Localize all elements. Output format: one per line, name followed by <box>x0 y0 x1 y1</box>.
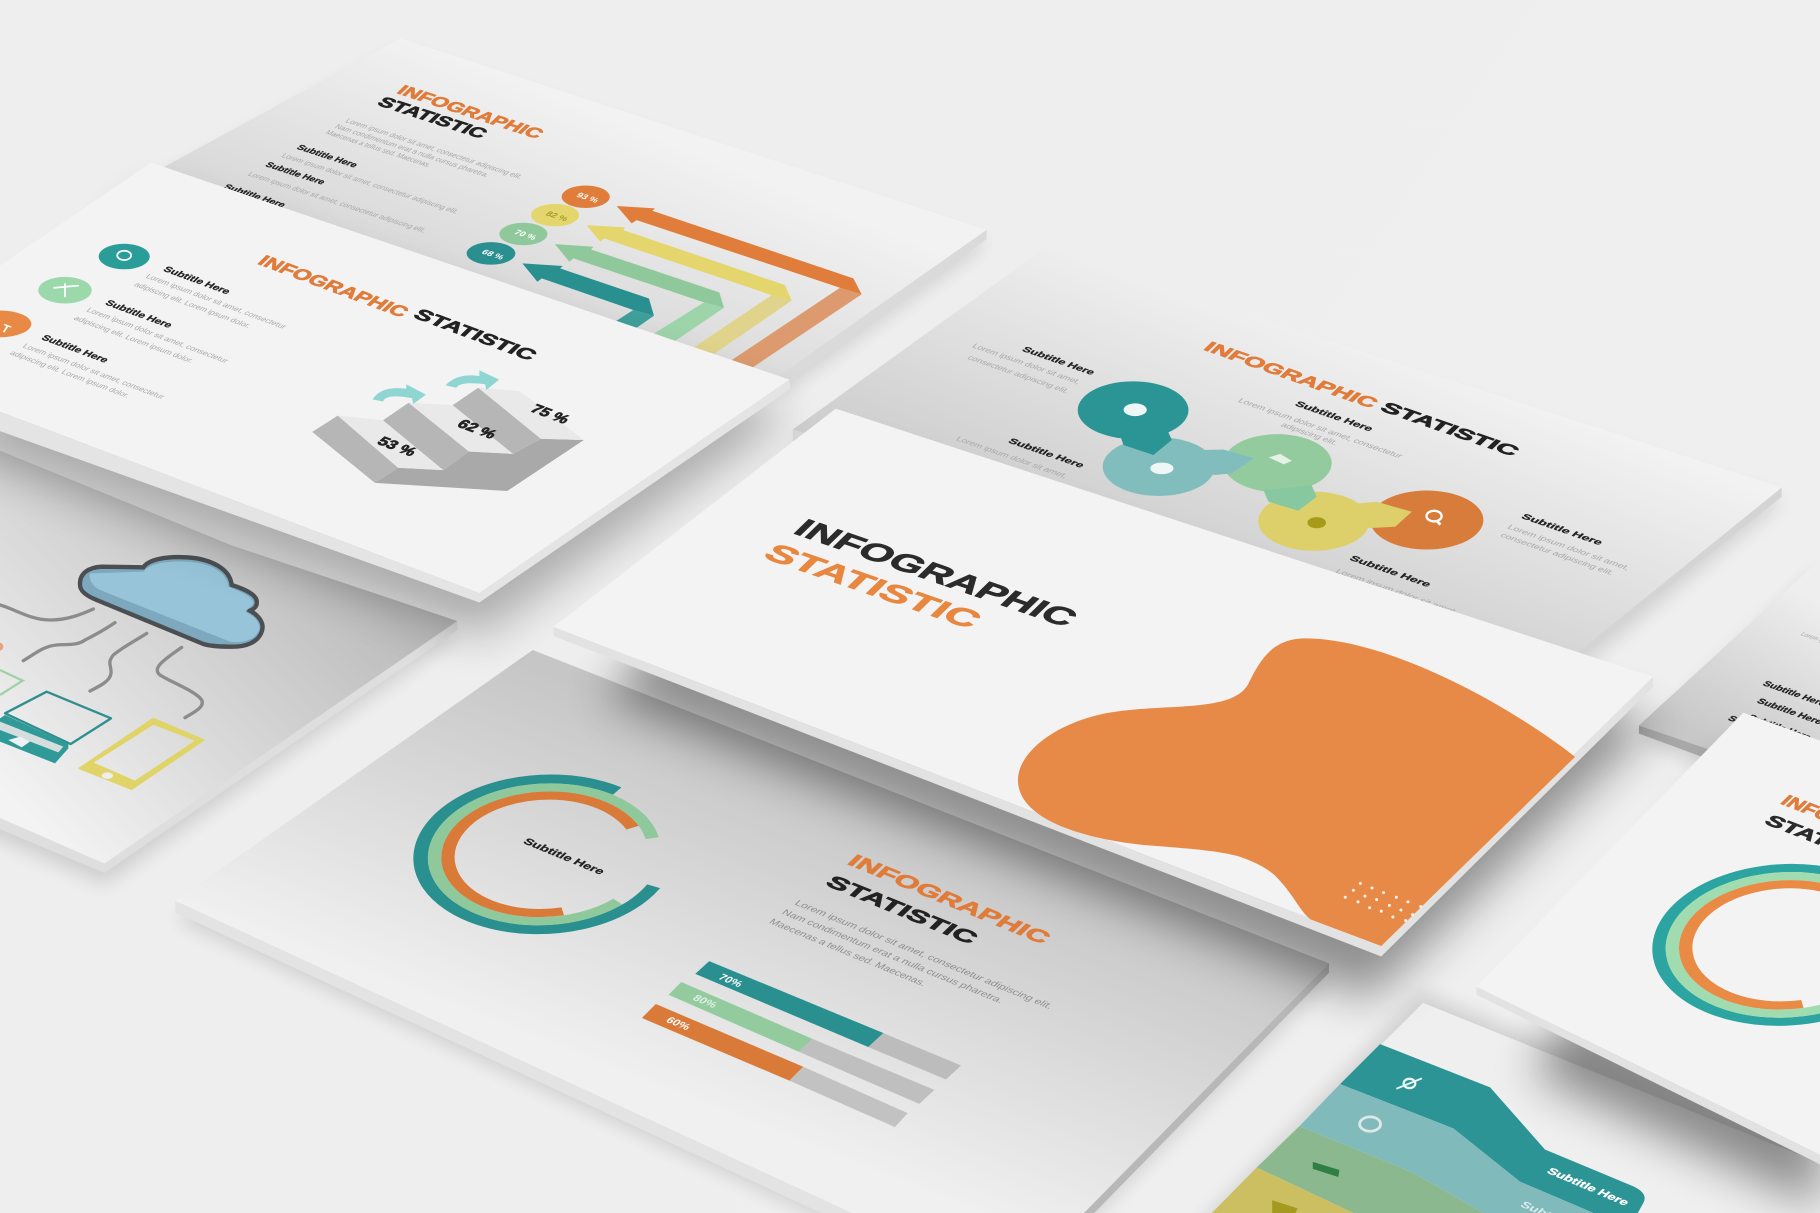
circle: green <box>1223 434 1332 511</box>
body text: Maecenas a tellus sed. Maecenas. <box>766 917 928 988</box>
slide face <box>151 38 987 378</box>
text: item 1 <box>966 342 1097 395</box>
slide: side slide subtitles <box>1639 559 1820 778</box>
ring: teal <box>1609 839 1820 1051</box>
title <box>757 514 1085 634</box>
slide edge <box>1476 987 1820 1164</box>
title: INFOGRAPHIC <box>253 253 413 321</box>
slide edge <box>0 380 790 602</box>
percent badge: 70 <box>499 223 547 245</box>
percent badge: 93 <box>562 186 610 208</box>
text: item 4 <box>1498 512 1633 577</box>
slide edge <box>766 230 987 385</box>
orange blob <box>1018 638 1575 946</box>
list item 1: Lorem ipsum dolor sit amet, consectetur <box>144 272 289 330</box>
subtitle list: Su <box>1725 714 1746 726</box>
text: item 3: Lorem ipsum dolor sit amet, <box>954 435 1070 480</box>
title <box>1760 793 1820 875</box>
icon: laptop <box>0 692 111 763</box>
band labels: Subtitle Here <box>1544 1166 1631 1208</box>
title: INFOGRAPHIC <box>393 82 548 142</box>
arrow: green <box>555 244 724 341</box>
slide edge <box>1639 725 1776 778</box>
text: item 1: Subtitle Here <box>1019 345 1097 377</box>
slide face <box>0 163 789 593</box>
slide face <box>793 248 1782 659</box>
circle: yellow <box>1258 492 1412 551</box>
slide: cloud network <box>0 441 457 873</box>
subtitle list <box>221 143 462 234</box>
list item 3: Lorem ipsum dolor sit amet, consectetur <box>21 342 167 400</box>
percent badge: 68 <box>467 242 515 265</box>
percent badge: 68: 68 % <box>480 248 507 261</box>
slide face <box>1639 559 1820 768</box>
title <box>1200 339 1524 459</box>
circle: orange <box>1370 491 1483 550</box>
title: INFOGRAPHIC <box>843 852 1055 948</box>
slide face <box>554 409 1653 946</box>
slide face <box>175 650 1329 1213</box>
percent badge: 93: 93 % <box>574 191 601 204</box>
icon: teal band <box>1396 1078 1422 1089</box>
band: light teal <box>1299 1084 1593 1213</box>
arrow: stair step 1 <box>373 384 426 404</box>
ring: orange <box>431 783 657 926</box>
circle: teal <box>1078 381 1188 455</box>
title <box>821 852 1055 948</box>
list item 3: adipiscing elit. Lorem ipsum dolor. <box>8 349 133 399</box>
body text: Lorem ipsum dolor sit amet, consectetur adipiscing elit. <box>343 117 526 180</box>
text: item 1: consectetur adipiscing elit. <box>966 353 1072 395</box>
network wires <box>0 605 202 718</box>
circle: light teal <box>1103 437 1254 496</box>
text: item 3: Subtitle Here <box>1005 437 1086 470</box>
title: STATISTIC <box>757 539 989 634</box>
icon: bars <box>1272 1200 1298 1213</box>
arrow: teal <box>522 263 654 328</box>
slide edge <box>554 627 1653 956</box>
label: 53: 53 % <box>373 435 420 459</box>
ring: green <box>1628 850 1820 1040</box>
icon: cloud <box>80 557 263 647</box>
slide: stacked area <box>1212 1003 1820 1213</box>
bar: 60 percent <box>642 1004 908 1127</box>
slide: arrows statistic <box>151 38 987 385</box>
icon: orange marker <box>0 643 3 651</box>
donut chart <box>1589 827 1820 1063</box>
slide: connected circles <box>793 248 1782 664</box>
percent badge: 82: 82 % <box>544 210 571 223</box>
band: teal <box>1340 1044 1645 1213</box>
stairs chart <box>312 388 584 491</box>
ring: orange <box>1670 872 1820 1018</box>
title: STATISTIC <box>373 94 492 141</box>
text: item 5: Subtitle Here <box>1347 554 1433 589</box>
dot pattern <box>1344 882 1422 922</box>
slide edge <box>0 621 457 873</box>
title <box>253 253 541 364</box>
label: 75: 75 % <box>527 402 573 427</box>
text: item 5 <box>1333 554 1461 616</box>
network artwork <box>0 557 263 789</box>
arrow: yellow <box>587 225 792 354</box>
percent badge: 70: 70 % <box>512 228 539 241</box>
subtitle list: Subtitle Here <box>294 143 360 170</box>
slide: stairs statistic <box>0 163 790 602</box>
icon: banknote <box>1313 1162 1339 1177</box>
list item 3: Subtitle Here <box>39 334 111 365</box>
icon: green badge <box>38 277 92 304</box>
band labels <box>1517 1166 1631 1213</box>
band: green <box>1257 1126 1483 1213</box>
icon: orange badge <box>0 311 31 337</box>
list item 1: Subtitle Here <box>160 265 233 297</box>
arrow: orange <box>617 206 862 367</box>
bar: 70 percent: 70% <box>715 973 745 989</box>
subtitle list: Lorem ipsum dolor sit amet, consectetur adipiscing elit. <box>246 170 429 234</box>
list item 2: adipiscing elit. Lorem ipsum dolor. <box>72 314 196 364</box>
list item 2: Subtitle Here <box>102 299 175 330</box>
slide face <box>1212 1003 1820 1213</box>
subtitle list: Subtitle Here <box>1745 713 1813 742</box>
donut label: Subtitle Here <box>520 837 607 877</box>
list item 1: adipiscing elit. Lorem ipsum dolor. <box>132 280 254 330</box>
title: STATISTIC <box>409 306 541 364</box>
slide: title <box>554 409 1653 956</box>
arrow: stair step 2 <box>446 370 499 390</box>
list item 2: Lorem ipsum dolor sit amet, consectetur <box>85 306 231 364</box>
body text: Maecenas a tellus sed. Maecenas. <box>324 128 434 169</box>
title: INFOGRAPHIC <box>787 514 1085 632</box>
bar: 70 percent <box>695 961 961 1079</box>
text: item 4: consectetur adipiscing elit. <box>1498 531 1617 577</box>
subtitle list: Subtitle Here <box>263 161 327 187</box>
subtitle list <box>1725 630 1820 742</box>
bar: 80 percent <box>669 982 934 1104</box>
text: item 2: adipiscing elit. <box>1279 421 1341 446</box>
ring: teal <box>377 754 712 955</box>
body text: Nam condimentum erat a nulla cursus pharetra. <box>779 908 1006 1005</box>
text: item 2: Lorem ipsum dolor sit amet, consectetur <box>1236 396 1405 460</box>
slide edge <box>1555 488 1782 664</box>
slide face <box>1476 713 1820 1155</box>
body text: Nam condimentum erat a nulla cursus pharetra. <box>333 122 492 179</box>
title: STATISTIC <box>821 872 982 948</box>
text: item 2: Subtitle Here <box>1292 400 1375 434</box>
donut chart <box>352 738 736 970</box>
slide edge <box>175 901 865 1213</box>
slide face <box>0 441 457 864</box>
label: 62: 62 % <box>453 417 500 442</box>
icon: coin <box>1360 1117 1381 1131</box>
icon: teal badge <box>99 244 150 269</box>
bar: 80 percent: 80% <box>690 993 720 1010</box>
percent badge: 82 <box>531 204 579 226</box>
body text: Lorem ipsum dolor sit amet, consectetur adipiscing elit. <box>792 899 1055 1011</box>
icon: tablet outline <box>0 670 23 695</box>
subtitle list: Subtitle Here <box>1754 697 1820 726</box>
title: INFOGRAPHIC <box>1200 339 1383 411</box>
slide: donut and bars <box>175 650 1329 1213</box>
text: item 1: Lorem ipsum dolor sit amet, <box>970 342 1083 386</box>
text: item 4: Subtitle Here <box>1518 512 1605 547</box>
subtitle list: Subtitle Here <box>221 183 288 209</box>
bar: 60 percent: 60% <box>663 1015 693 1032</box>
band: yellow <box>1212 1167 1353 1213</box>
icon: phone <box>79 718 204 789</box>
text: item 4: Lorem ipsum dolor sit amet, <box>1505 523 1633 572</box>
slide: right donut <box>1476 713 1820 1164</box>
text: item 5: Lorem ipsum dolor sit amet, <box>1333 567 1461 616</box>
title: STATISTIC <box>1376 399 1524 459</box>
ring: green <box>389 760 699 949</box>
subtitle list: Lorem ipsum dolor sit amet, consectetur adipiscing elit. <box>280 151 462 215</box>
